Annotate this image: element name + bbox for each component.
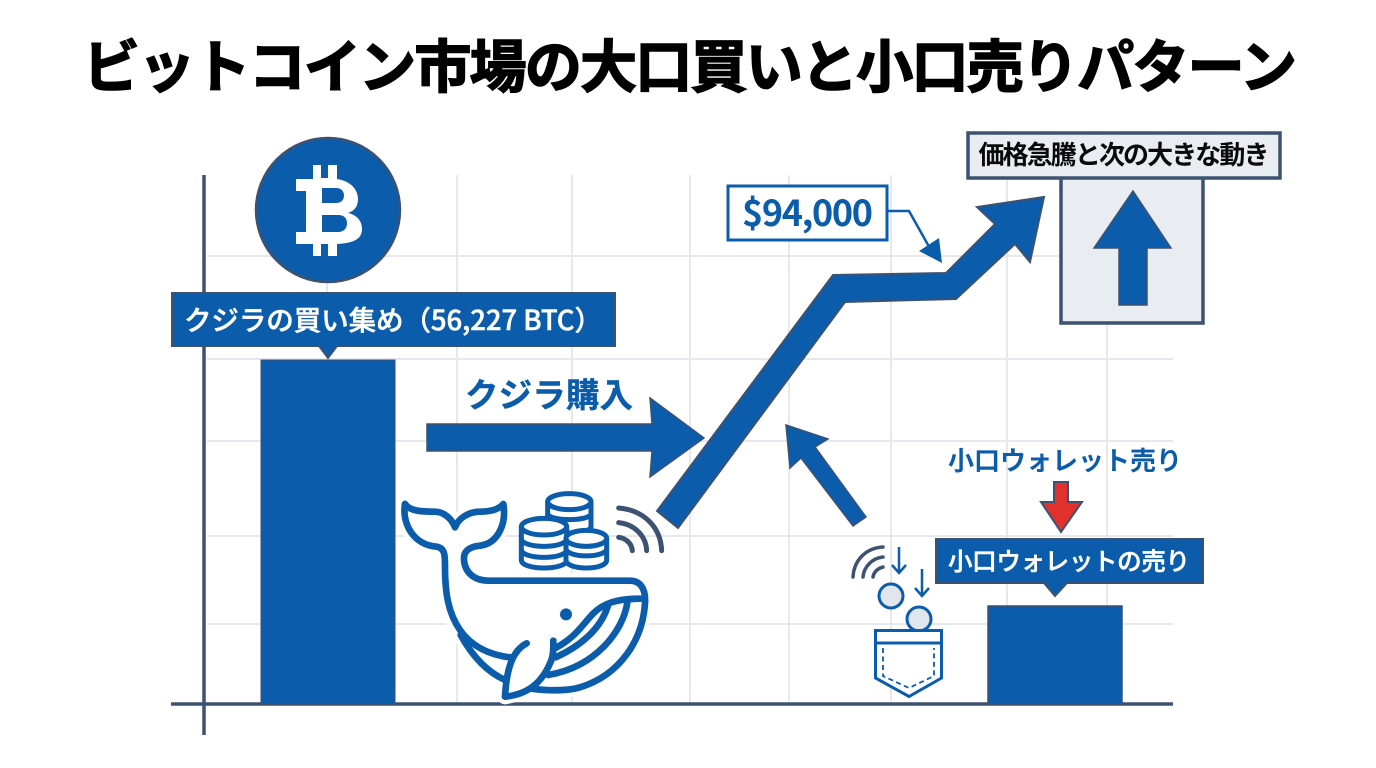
callout: whale accumulation: クジラの買い集め（56,227 BTC）: [184, 298, 602, 338]
arrow: red down: [1041, 482, 1082, 532]
icon: pocket with coins: [853, 547, 942, 696]
arrow: main price rise: [657, 197, 1044, 528]
title: ビットコイン市場の大口買いと小口売りパターン: [83, 22, 1297, 104]
pointer arrow: [888, 211, 942, 263]
icon: bitcoin coin: [256, 138, 400, 282]
coin stacks: [521, 494, 607, 568]
panel: next big move: [1061, 176, 1203, 323]
coins: [879, 584, 931, 631]
callout: small wallet selling: [936, 539, 1203, 596]
signal waves: [853, 547, 883, 577]
falling arrows: [892, 547, 929, 596]
label: whale buying: クジラ購入: [465, 368, 633, 417]
icon: whale with coins and signal: [404, 494, 662, 697]
whale white silhouette: [404, 504, 645, 697]
signal waves: [619, 508, 662, 551]
price callout: $94,000: [728, 185, 942, 263]
chart axes: [171, 175, 1173, 735]
whale outline: [404, 504, 645, 697]
callout: whale accumulation: [172, 293, 615, 358]
label: small wallet selling: 小口ウォレット売り: [948, 441, 1182, 478]
arrow: whale buying: [427, 398, 704, 477]
heading: price surge label: 価格急騰と次の大きな動き: [978, 135, 1270, 172]
callout: small wallet selling: 小口ウォレットの売り: [948, 543, 1190, 578]
price callout: $94,000: $94,000: [742, 185, 873, 237]
bar: small wallet selling: [988, 606, 1122, 704]
pocket: [876, 630, 942, 696]
bar: whale accumulation: [261, 360, 395, 704]
arrow: wallet selling pressure: [786, 425, 866, 526]
icon: up arrow: [1094, 191, 1171, 305]
